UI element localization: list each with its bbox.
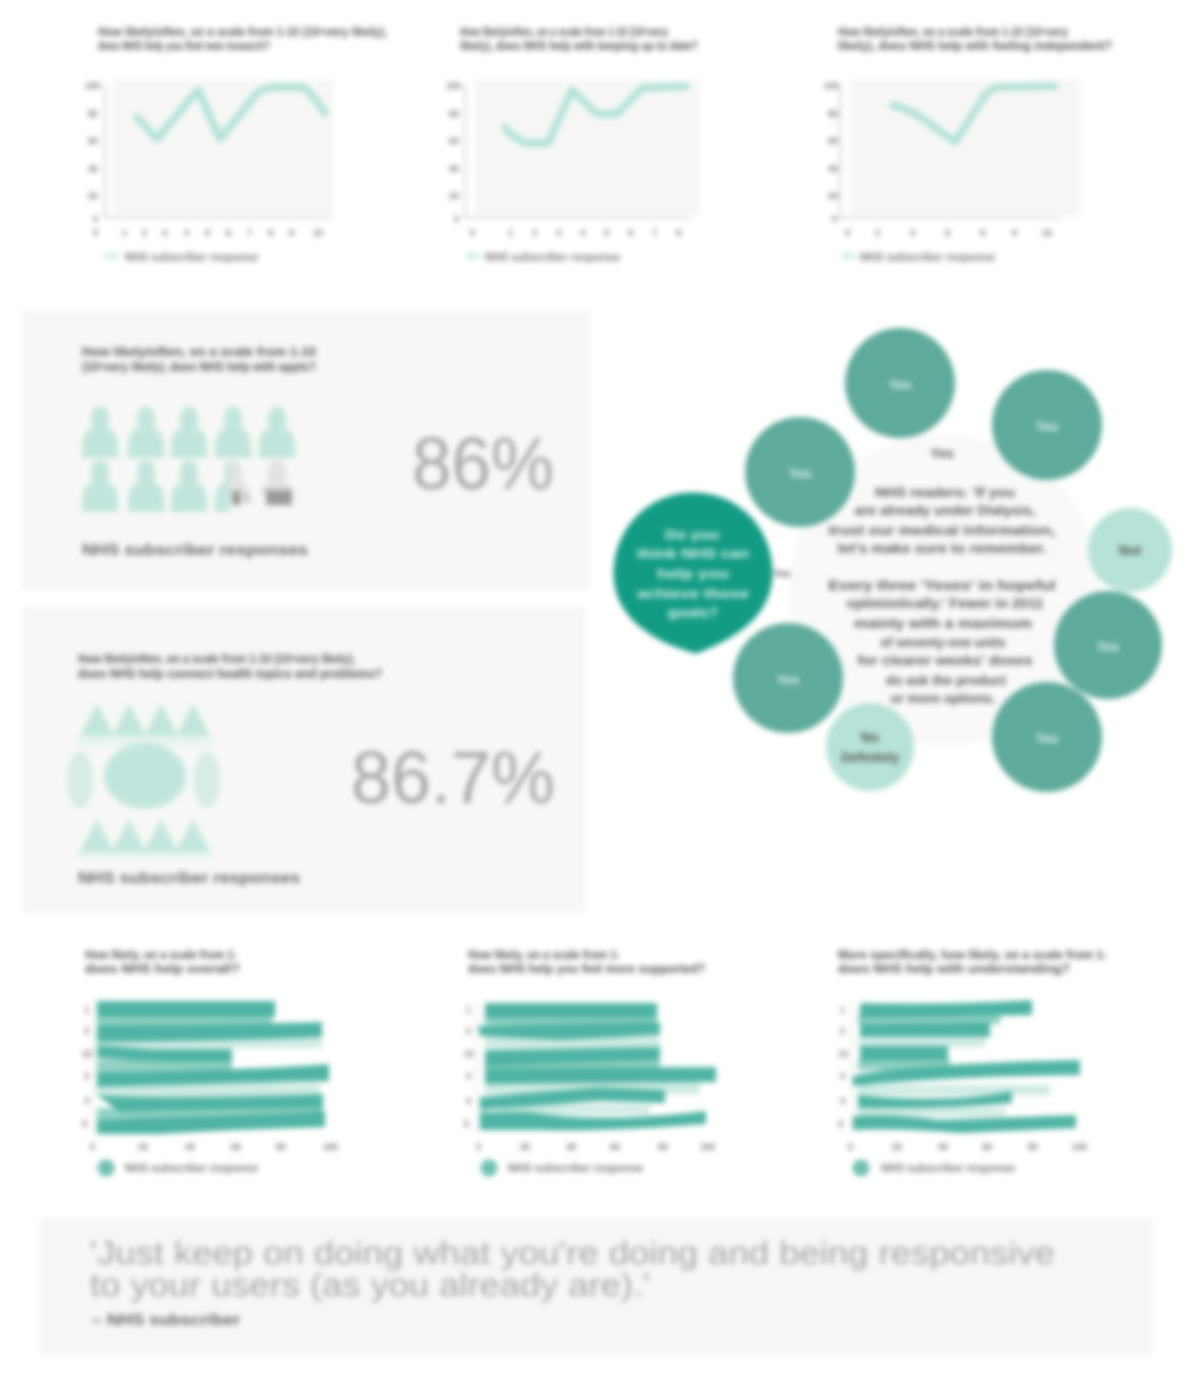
answer bubbles: Not: [1119, 543, 1142, 558]
bar chart: question two: NHS subscriber response: [508, 1161, 643, 1175]
panel: 86.7% brain health: [22, 607, 585, 912]
panel: 86% agreement: [22, 310, 590, 590]
bar chart: question one: 10: [82, 1049, 92, 1059]
answer bubbles: No: [861, 730, 879, 745]
answer bubbles: Yes: [1036, 731, 1058, 746]
connector label: Yes: [773, 569, 791, 580]
line chart: first survey question: 8: [268, 228, 273, 238]
line chart: third survey question: 4: [910, 228, 915, 238]
line chart: first survey question: 0: [93, 214, 98, 224]
line chart: second survey question: 20: [449, 191, 459, 201]
panel: subscriber quote: [40, 1218, 1152, 1355]
question bubble: Do you: [665, 527, 719, 542]
statistic: 86.7%: [351, 736, 555, 819]
line chart: third survey question: 9: [1012, 228, 1017, 238]
answer bubbles: Definitely: [841, 750, 899, 765]
line chart: second survey question: 100: [446, 81, 461, 91]
bar chart: question two: How likely, on a scale from 1-: [468, 948, 620, 962]
bar chart: question two: [464, 948, 716, 1176]
bar chart: question three: 80: [1028, 1142, 1038, 1152]
statistic: 86%: [412, 422, 554, 505]
answer bubbles: Yes: [777, 672, 799, 687]
question bubble: goals?: [668, 605, 718, 620]
bar chart: question three: [838, 948, 1107, 1176]
quote: to your users (as you already are).': [90, 1267, 650, 1303]
bar chart: question two: 5: [464, 1119, 469, 1129]
line chart: first survey question: 4: [184, 228, 189, 238]
bar chart: question two: 60: [610, 1142, 620, 1152]
answer bubbles: Yes: [889, 377, 911, 392]
bar chart: question two: 10: [464, 1049, 474, 1059]
caption: NHS subscriber responses: [82, 542, 308, 559]
caption: NHS subscriber responses: [78, 870, 300, 887]
line chart: second survey question: 3: [556, 228, 561, 238]
panel heading: How likely/often, on a scale from 1-10: [82, 345, 316, 359]
bar chart: question three: More specifically, how likely, on a scale from 1-: [838, 948, 1107, 962]
bar chart: question two: 100: [700, 1142, 715, 1152]
bubble diagram: [616, 328, 1172, 792]
line chart: first survey question: 40: [88, 164, 98, 174]
bar chart: question one: does NHS help overall?: [85, 962, 240, 976]
bar chart: question two: does NHS help you feel more supported?: [468, 962, 705, 976]
bar chart: question one: NHS subscriber response: [125, 1161, 258, 1175]
bar chart: question three: 100: [1072, 1142, 1087, 1152]
line chart: second survey question: 2: [532, 228, 537, 238]
line chart: first survey question: 60: [88, 136, 98, 146]
bar chart: question three: does NHS help with understanding?: [838, 962, 1070, 976]
explanation text: trust our medical information,: [828, 523, 1056, 538]
explanation text: or more options.: [890, 691, 996, 706]
bar chart: question one: 20: [138, 1142, 148, 1152]
line chart: first survey question: 20: [88, 191, 98, 201]
bar chart: question one: 80: [276, 1142, 286, 1152]
quote: 'Just keep on doing what you're doing and being responsive: [90, 1235, 1055, 1271]
line chart: third survey question: 10: [1042, 228, 1052, 238]
explanation text: NHS readers: 'If you: [875, 485, 1015, 500]
answer bubbles: Yes: [1097, 639, 1119, 654]
line chart: second survey question: 4: [580, 228, 585, 238]
line chart: third survey question: 20: [828, 191, 838, 201]
bar chart: question two: 40: [566, 1142, 576, 1152]
bar chart: question two: 80: [658, 1142, 668, 1152]
line chart: first survey question: 80: [88, 109, 98, 119]
line chart: third survey question: 0: [845, 228, 850, 238]
line chart: first survey question: does NHS help you find new research?: [98, 39, 270, 53]
explanation backdrop: [790, 435, 1100, 745]
line chart: second survey question: 8: [676, 228, 681, 238]
line chart: first survey question: [85, 25, 387, 264]
question bubble: achieve those: [637, 586, 749, 601]
bar chart: question three: 60: [982, 1142, 992, 1152]
bar chart: question three: 3: [840, 1071, 845, 1081]
line chart: third survey question: How likely/often, on a scale from 1-10 (10=very: [838, 25, 1068, 39]
bar chart: question one: 60: [231, 1142, 241, 1152]
answer bubbles: Yes: [1036, 419, 1058, 434]
answer bubbles: [733, 328, 1172, 792]
line chart: first survey question: 7: [247, 228, 252, 238]
line chart: second survey question: 5: [604, 228, 609, 238]
bar chart: question three: 5: [838, 1119, 843, 1129]
line chart: second survey question: [446, 25, 700, 264]
line chart: third survey question: 40: [828, 164, 838, 174]
explanation text: let's make sure to remember.: [838, 541, 1046, 556]
explanation text: of seventy-one units: [880, 635, 1006, 650]
bar chart: question three: 4: [840, 1096, 845, 1106]
line chart: second survey question: 60: [449, 136, 459, 146]
explanation text: mainly with a maximum: [854, 616, 1032, 631]
quote: [90, 1235, 1055, 1303]
question bubble: think NHS can: [637, 546, 749, 561]
panel heading: How likely/often, on a scale from 1-10 (10=very likely),: [78, 652, 355, 666]
bar chart: question two: 1: [466, 1005, 471, 1015]
bar chart: question one: 4: [84, 1096, 89, 1106]
bar chart: question three: 1: [840, 1005, 845, 1015]
question bubble: help you: [657, 566, 729, 581]
bar chart: question one: 0: [90, 1142, 95, 1152]
line chart: third survey question: 6: [945, 228, 950, 238]
bar chart: question one: 1: [84, 1005, 89, 1015]
question bubble: [616, 495, 770, 651]
line chart: second survey question: 80: [449, 109, 459, 119]
bar chart: question one: How likely, on a scale from 1-: [85, 948, 237, 962]
line chart: first survey question: 5: [205, 228, 210, 238]
explanation text: for clearer weeks' doses: [858, 653, 1032, 668]
icon: brain with surrounding heads: [67, 703, 220, 858]
line chart: second survey question: NHS subscriber response: [485, 250, 620, 264]
line chart: third survey question: [824, 25, 1112, 264]
explanation text: are already under Dialysis,: [854, 503, 1036, 518]
line chart: third survey question: 8: [980, 228, 985, 238]
line chart: third survey question: 100: [824, 81, 839, 91]
line chart: first survey question: 3: [162, 228, 167, 238]
panel heading: [78, 652, 382, 681]
bar chart: question one: 100: [323, 1142, 338, 1152]
line chart: second survey question: 6: [628, 228, 633, 238]
explanation text: Yes: [930, 446, 954, 461]
line chart: second survey question: 0: [470, 228, 475, 238]
attribution: – NHS subscriber: [92, 1312, 240, 1329]
panel heading: [82, 345, 316, 374]
bar chart: question one: 2: [84, 1026, 89, 1036]
bar chart: question one: 3: [84, 1071, 89, 1081]
line chart: third survey question: likely), does NHS help with feeling independent?: [838, 39, 1112, 53]
line chart: third survey question: 0: [832, 214, 837, 224]
line chart: first survey question: 0: [93, 228, 98, 238]
bar chart: question three: 10: [838, 1049, 848, 1059]
answer bubbles: Yes: [789, 466, 811, 481]
bar chart: question three: 2: [840, 1026, 845, 1036]
bar chart: question two: 20: [520, 1142, 530, 1152]
bar chart: question one: 5: [82, 1119, 87, 1129]
bar chart: question three: 40: [938, 1142, 948, 1152]
line chart: first survey question: 2: [142, 228, 147, 238]
line chart: first survey question: 1: [122, 228, 127, 238]
line chart: second survey question: 7: [652, 228, 657, 238]
line chart: third survey question: 60: [828, 136, 838, 146]
bar chart: question two: 0: [476, 1142, 481, 1152]
line chart: second survey question: 0: [454, 214, 459, 224]
explanation text: Every three 'Yeses' in hopeful: [828, 578, 1056, 593]
line chart: first survey question: 6: [226, 228, 231, 238]
explanation text: [828, 446, 1056, 706]
line chart: third survey question: 2: [875, 228, 880, 238]
line chart: second survey question: 1: [508, 228, 513, 238]
panel heading: does NHS help connect health topics and problems?: [78, 667, 382, 681]
line chart: second survey question: How likely/often, on a scale from 1-10 (10=very: [460, 25, 668, 39]
line chart: first survey question: 9: [289, 228, 294, 238]
explanation text: optimistically.' Fewer in 2011: [846, 596, 1044, 611]
bar chart: question two: 3: [466, 1071, 471, 1081]
bar chart: question one: 40: [185, 1142, 195, 1152]
bar chart: question one: [82, 948, 338, 1176]
line chart: first survey question: 100: [85, 81, 100, 91]
bar chart: question two: 2: [466, 1026, 471, 1036]
line chart: third survey question: NHS subscriber response: [860, 250, 995, 264]
line chart: first survey question: How likely/often, on a scale from 1-10 (10=very likely),: [98, 25, 387, 39]
line chart: second survey question: likely), does NHS help with keeping up to date?: [460, 39, 698, 53]
bar chart: question three: NHS subscriber response: [881, 1161, 1015, 1175]
bar chart: question two: 4: [466, 1096, 471, 1106]
bar chart: question three: 0: [848, 1142, 853, 1152]
line chart: third survey question: 80: [828, 109, 838, 119]
line chart: second survey question: 40: [449, 164, 459, 174]
line chart: first survey question: 10: [313, 228, 323, 238]
panel heading: (10=very likely), does NHS help with appts?: [82, 360, 316, 374]
icon row: people pictogram: [82, 406, 295, 512]
line chart: first survey question: NHS subscriber response: [125, 250, 258, 264]
bar chart: question three: 20: [892, 1142, 902, 1152]
explanation text: do ask the product: [886, 673, 1006, 688]
